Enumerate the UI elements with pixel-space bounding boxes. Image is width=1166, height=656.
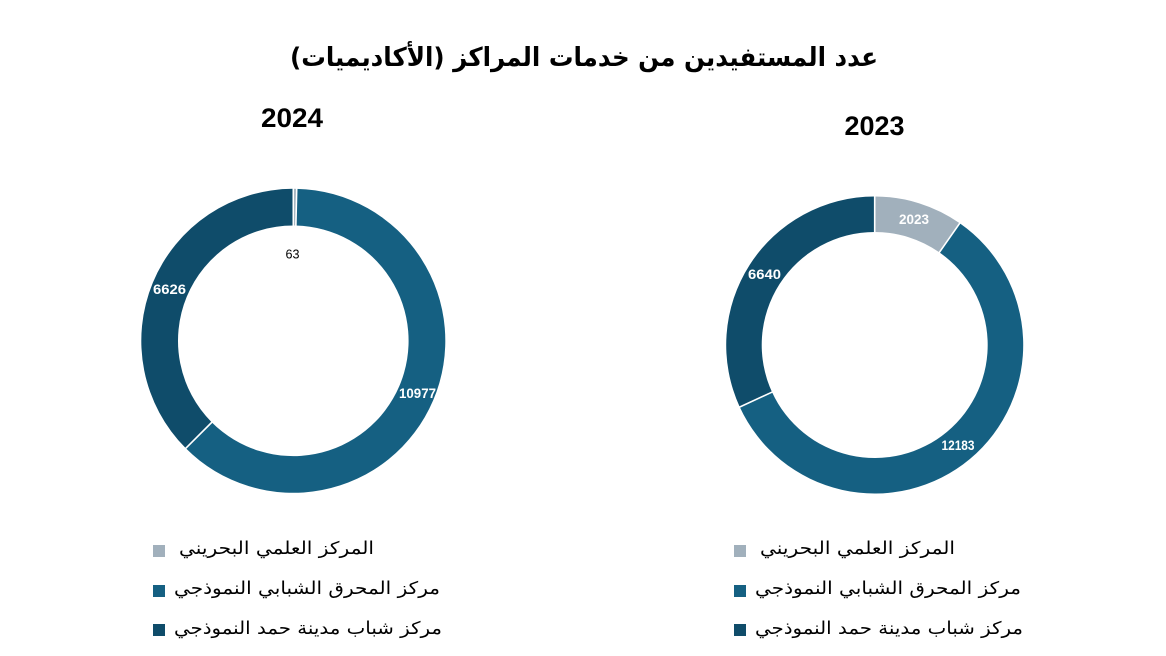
- legend swatch: المركز العلمي البحريني: [734, 545, 746, 557]
- legend swatch: مركز شباب مدينة حمد النموذجي: [153, 624, 165, 636]
- legend: 2023: [734, 539, 1023, 639]
- value label: 2023: 2023: [899, 211, 929, 227]
- legend label: المركز العلمي البحريني: المركز العلمي البحريني: [760, 539, 955, 559]
- legend swatch: مركز شباب مدينة حمد النموذجي: [734, 624, 746, 636]
- value label: 10977: 10977: [399, 385, 436, 401]
- value label: 12183: 12183: [942, 437, 975, 453]
- legend label: مركز شباب مدينة حمد النموذجي: مركز شباب مدينة حمد النموذجي: [755, 619, 1023, 639]
- title: عدد المستفيدين من خدمات المراكز (الأكاديميات): [290, 41, 878, 73]
- legend label: مركز المحرق الشبابي النموذجي: مركز المحرق الشبابي النموذجي: [755, 579, 1021, 599]
- heading: 2023: 2023: [844, 111, 904, 141]
- legend label: مركز شباب مدينة حمد النموذجي: مركز شباب مدينة حمد النموذجي: [174, 619, 442, 639]
- donut chart: 2024: [141, 188, 445, 493]
- slice: 6640: [726, 196, 875, 407]
- legend swatch: المركز العلمي البحريني: [153, 545, 165, 557]
- value label: 63: 63: [286, 246, 300, 262]
- legend label: المركز العلمي البحريني: المركز العلمي البحريني: [179, 539, 374, 559]
- legend swatch: مركز المحرق الشبابي النموذجي: [153, 585, 165, 597]
- legend label: مركز المحرق الشبابي النموذجي: مركز المحرق الشبابي النموذجي: [174, 579, 440, 599]
- slice: 12183: [740, 223, 1023, 493]
- value label: 6640: 6640: [748, 266, 781, 282]
- slice: 6626: [141, 189, 293, 448]
- slice: 10977: [186, 189, 445, 493]
- value label: 6626: 6626: [153, 281, 186, 297]
- slice: 2023: [875, 196, 960, 252]
- donut chart: 2023: [726, 196, 1023, 493]
- legend swatch: مركز المحرق الشبابي النموذجي: [734, 585, 746, 597]
- slice: 63: [293, 189, 297, 226]
- heading: 2024: 2024: [261, 103, 323, 133]
- legend: 2024: [153, 539, 442, 639]
